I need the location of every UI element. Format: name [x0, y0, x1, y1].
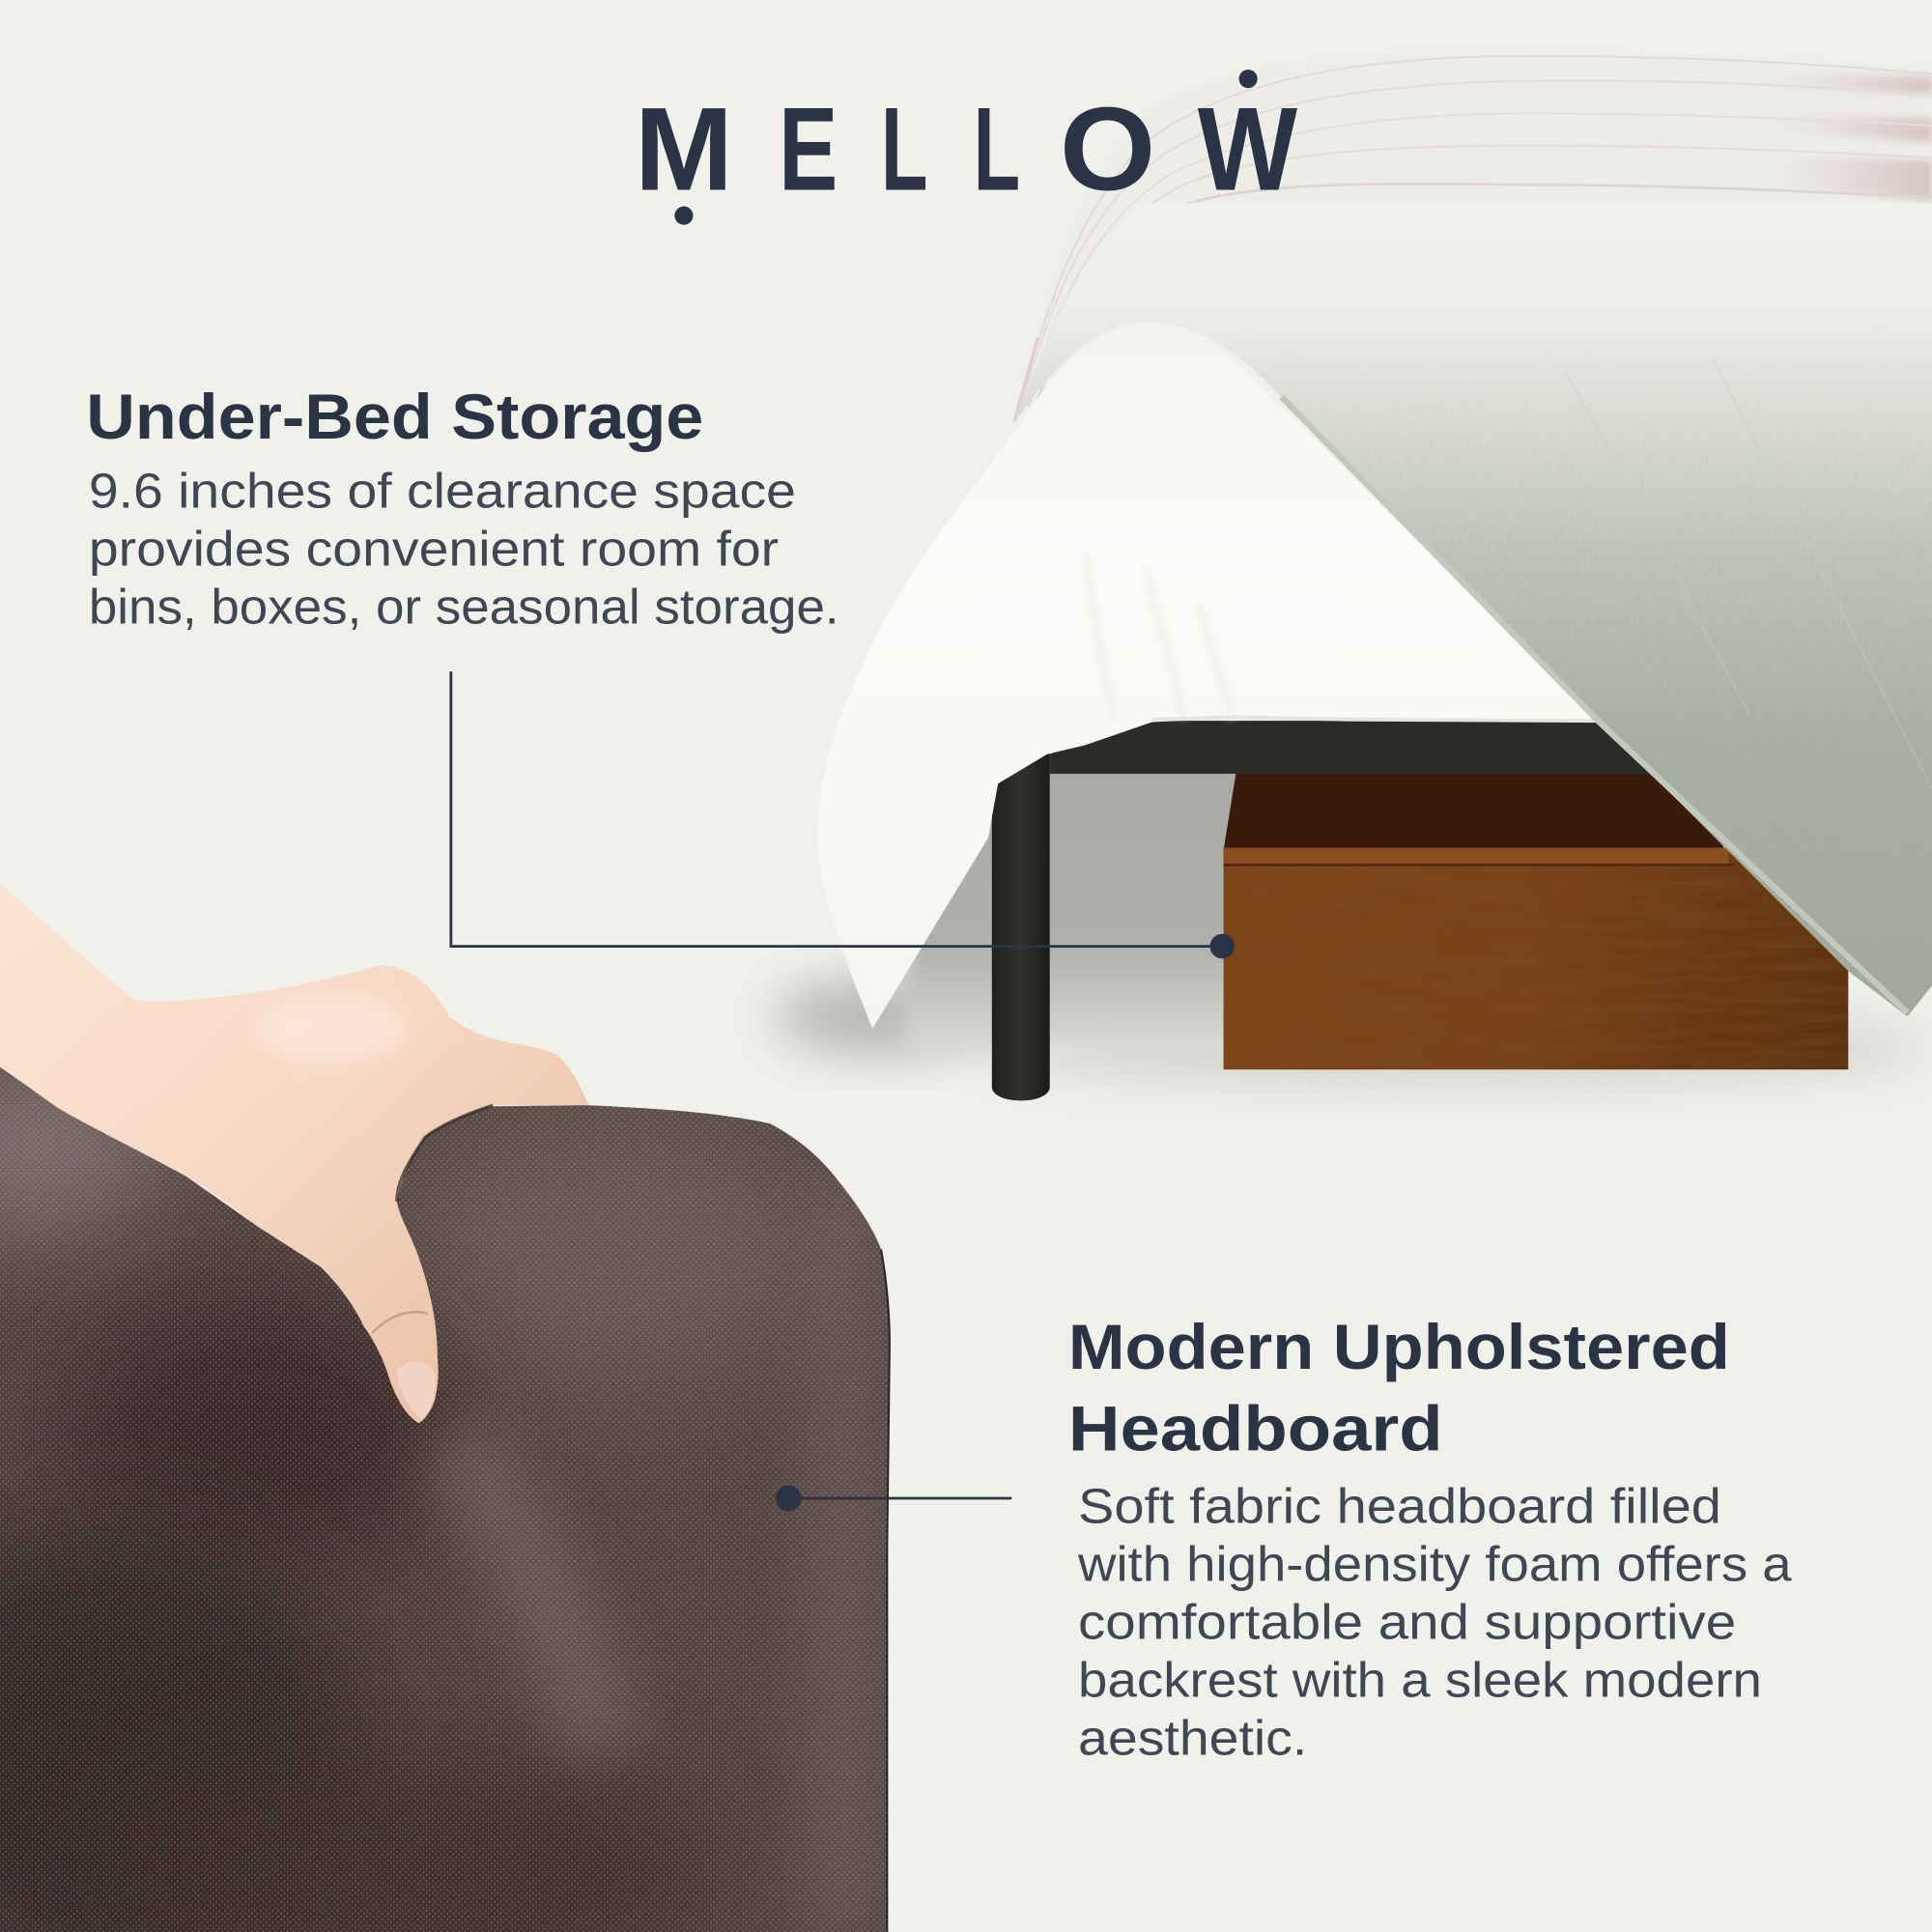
heading: Modern Upholstered Headboard: Headboard [1068, 1393, 1443, 1464]
storage drawer [1224, 774, 1848, 1069]
text block: headboard description: with high-density foam offers a [1077, 1536, 1792, 1591]
text block: under-bed storage description: 9.6 inches of clearance space [89, 464, 796, 519]
text block: under-bed storage description: provides convenient room for [89, 521, 779, 576]
logo: MELLOW: L [881, 82, 927, 214]
logo: MELLOW: O [1060, 82, 1155, 214]
text block: headboard description: aesthetic. [1078, 1710, 1307, 1765]
heading: Modern Upholstered Headboard: Modern Upholstered [1068, 1312, 1730, 1383]
photo: upholstered headboard with hand [0, 885, 899, 1932]
heading: Under-Bed Storage: Under-Bed Storage [86, 382, 703, 453]
thumbnail [397, 1362, 435, 1419]
logo: MELLOW: L [974, 82, 1020, 214]
text block: headboard description: comfortable and supportive [1078, 1594, 1736, 1649]
logo: MELLOW: M [635, 82, 733, 214]
faint wisps above duvet [1015, 52, 1932, 419]
photo: bed with under-bed storage drawer [777, 52, 1932, 1100]
text block: headboard description [1077, 1479, 1792, 1765]
text block: headboard description: Soft fabric headboard filled [1078, 1479, 1721, 1534]
logo: MELLOW: W [1198, 82, 1298, 214]
floor shadow under bed [777, 774, 1932, 1084]
text block: under-bed storage description: bins, boxes, or seasonal storage. [89, 579, 839, 634]
logo: MELLOW: E [779, 82, 838, 214]
sage duvet [1010, 203, 1932, 1023]
text block: headboard description: backrest with a sleek modern [1078, 1652, 1762, 1707]
metal leg [992, 742, 1050, 1100]
heading: Modern Upholstered Headboard [1068, 1312, 1730, 1464]
callout line: headboard [776, 1486, 1011, 1511]
metal frame rail [1050, 721, 1658, 774]
text block: under-bed storage description [89, 464, 839, 634]
callout line: storage [451, 671, 1235, 958]
white sheet [818, 323, 1598, 1029]
hand [0, 885, 589, 1423]
fabric headboard [0, 1060, 899, 1932]
logo: MELLOW [635, 70, 1298, 225]
